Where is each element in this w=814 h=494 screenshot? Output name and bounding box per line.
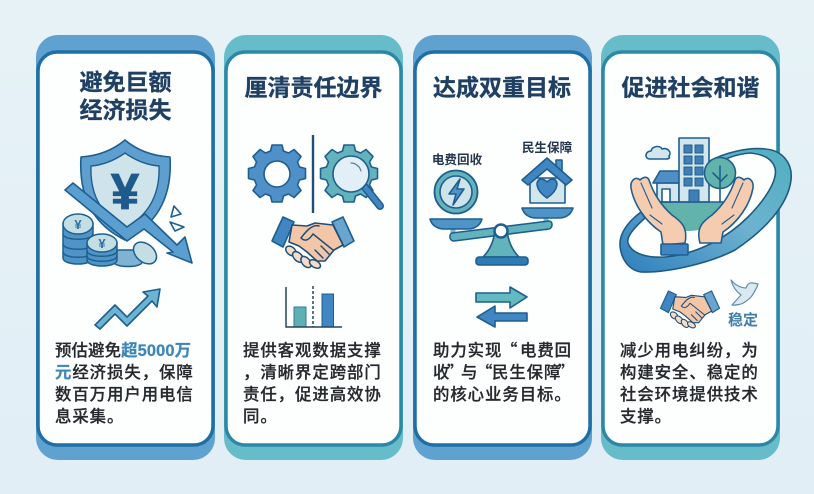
icon: gear	[248, 145, 306, 202]
text block 3: “	[476, 359, 493, 383]
text block 2: 同。	[243, 408, 278, 426]
text block 3: 与	[461, 364, 478, 382]
text block 2: 提供客观数据支撑	[243, 341, 382, 360]
icon: community buildings	[645, 138, 736, 231]
panel: 促进社会和谐	[601, 35, 791, 460]
text block 3: ”	[558, 359, 575, 383]
text block 3: 电费回	[520, 342, 572, 360]
text block 3	[433, 337, 575, 404]
text block 1: 数百万用户用电信	[55, 386, 194, 404]
icon: shield with yuan, falling arrow and coins	[63, 140, 192, 268]
card frame 4	[601, 35, 780, 460]
icon: shield with yuan, falling arrow and coins: ¥	[111, 164, 139, 220]
text block 4	[620, 342, 759, 426]
text block 2: 责任，促进高效协	[243, 386, 382, 404]
text block 4: 构建安全、稳定的	[620, 363, 759, 382]
divider line	[312, 135, 314, 213]
text block 4: 支撑。	[620, 408, 672, 426]
heading 1	[80, 69, 172, 123]
icon: handshake	[272, 217, 354, 270]
label: 电费回收: 电费回收	[432, 152, 483, 167]
label: 民生保障: 民生保障	[522, 140, 573, 155]
text block 4: 减少用电纠纷，为	[620, 342, 759, 360]
icon: rising arrow	[95, 289, 160, 329]
text block 2	[243, 341, 382, 426]
text block 1	[55, 341, 194, 426]
card frame 2	[224, 35, 403, 460]
icon: shield with yuan, falling arrow and coins: ¥	[98, 236, 106, 251]
icon: gear with magnifier	[320, 145, 380, 206]
heading 3: 达成双重目标	[433, 74, 571, 100]
icon: caring hands	[631, 177, 753, 255]
icon: cloud	[646, 147, 670, 159]
text block 3: 的核心业务目标。	[433, 386, 572, 404]
heading 4: 促进社会和谐	[622, 74, 760, 100]
text block 3: ”	[447, 359, 464, 383]
heading 1: 避免巨额	[80, 69, 172, 95]
text block 1: 元经济损失，保障	[55, 364, 194, 382]
icon: exchange arrows	[476, 287, 527, 327]
text block 1: 预估避免超5000万	[55, 341, 192, 360]
heading 1: 经济损失	[80, 97, 172, 123]
panel: 避免巨额经济损失	[36, 35, 215, 460]
text block 2: ，清晰界定跨部门	[243, 363, 382, 382]
icon: shield with yuan, falling arrow and coins: ¥	[74, 217, 82, 232]
text block 1: 息采集。	[55, 407, 124, 426]
text block 3: 助力实现	[433, 342, 502, 360]
card frame 3	[413, 35, 592, 460]
panel: 厘清责任边界	[224, 35, 403, 460]
panel: 达成双重目标	[413, 35, 592, 460]
card frame 1	[36, 35, 215, 460]
text block 4: 社会环境提供技术	[620, 385, 759, 404]
icon: balance scale	[430, 208, 573, 265]
icon: dove	[731, 280, 758, 305]
text block 3: 民生保障	[492, 364, 561, 382]
icon: ring	[620, 149, 791, 272]
heading 2: 厘清责任边界	[244, 74, 382, 100]
icon: lightning coin	[434, 170, 478, 214]
icon: house with heart	[522, 158, 572, 203]
icon: bar chart	[286, 286, 342, 327]
icon: small handshake	[660, 291, 720, 329]
label: 稳定: 稳定	[728, 311, 758, 329]
text block 3: 收	[433, 364, 450, 382]
text block 3: “	[501, 337, 518, 361]
